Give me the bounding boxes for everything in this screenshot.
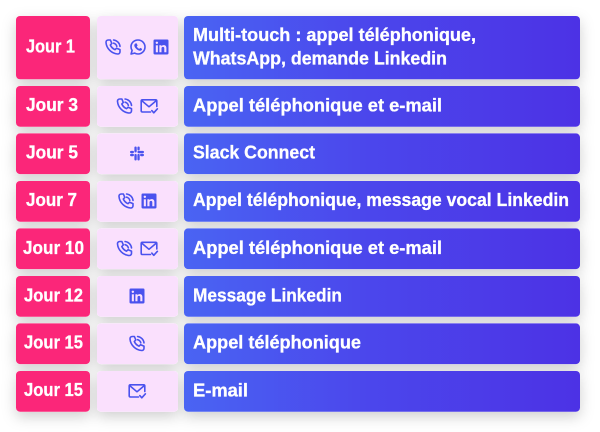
action: Slack Connect: Slack Connect [193, 143, 315, 163]
row: Jour 7 [16, 181, 580, 222]
day badge: Jour 5: Jour 5 [26, 143, 78, 163]
row: Jour 15 e-mail [16, 371, 580, 412]
day badge: Jour 12: Jour 12 [24, 285, 83, 305]
day badge: Jour 12 [16, 276, 90, 317]
channel icon: e-mail [97, 371, 178, 412]
channel icons: phone, e-mail [97, 86, 178, 127]
row: Jour 15 call [16, 323, 580, 364]
channel icon: phone [97, 323, 178, 364]
row: Jour 10 [16, 228, 580, 269]
day badge: Jour 15: Jour 15 [24, 380, 83, 400]
action: call and e-mail [184, 86, 580, 127]
day badge: Jour 3: Jour 3 [26, 95, 78, 115]
day badge: Jour 15 [16, 323, 90, 364]
channel icons: phone, WhatsApp, LinkedIn [97, 16, 178, 79]
action: call and e-mail [184, 228, 580, 269]
row: Jour 12 [16, 276, 580, 317]
day badge: Jour 5 [16, 133, 90, 174]
row: Jour 1 [16, 16, 580, 79]
action: e-mail [184, 371, 580, 412]
action: Slack Connect [184, 133, 580, 174]
channel icon: Slack [97, 133, 178, 174]
row: Jour 3 [16, 86, 580, 127]
day badge: Jour 10 [16, 228, 90, 269]
action: multi-touch: WhatsApp, demande Linkedin [193, 48, 447, 68]
action: multi-touch [184, 16, 580, 79]
day badge: Jour 10: Jour 10 [23, 238, 84, 258]
action: call: Appel téléphonique [193, 332, 361, 352]
day badge: Jour 7 [16, 181, 90, 222]
action: LinkedIn message [184, 276, 580, 317]
action: LinkedIn message: Message Linkedin [193, 285, 342, 305]
action: call and e-mail: Appel téléphonique et e-mail [193, 95, 442, 115]
day badge: Jour 3 [16, 86, 90, 127]
channel icons: phone, e-mail [97, 228, 178, 269]
channel icon: LinkedIn [97, 276, 178, 317]
action: multi-touch: Multi-touch : appel téléphonique, [193, 25, 476, 45]
day badge: Jour 7: Jour 7 [26, 190, 77, 210]
channel icons: phone, LinkedIn [97, 181, 178, 222]
row: Jour 5 [16, 133, 580, 174]
day badge: Jour 1: Jour 1 [26, 36, 75, 56]
action: e-mail: E-mail [193, 380, 248, 400]
day badge: Jour 15: Jour 15 [24, 332, 83, 352]
day badge: Jour 1 [16, 16, 90, 79]
action: call and LinkedIn voice message: Appel téléphonique, message vocal Linkedin [193, 190, 569, 210]
day badge: Jour 15 [16, 371, 90, 412]
action: call [184, 323, 580, 364]
action: call and LinkedIn voice message [184, 181, 580, 222]
action: call and e-mail: Appel téléphonique et e-mail [193, 238, 442, 258]
